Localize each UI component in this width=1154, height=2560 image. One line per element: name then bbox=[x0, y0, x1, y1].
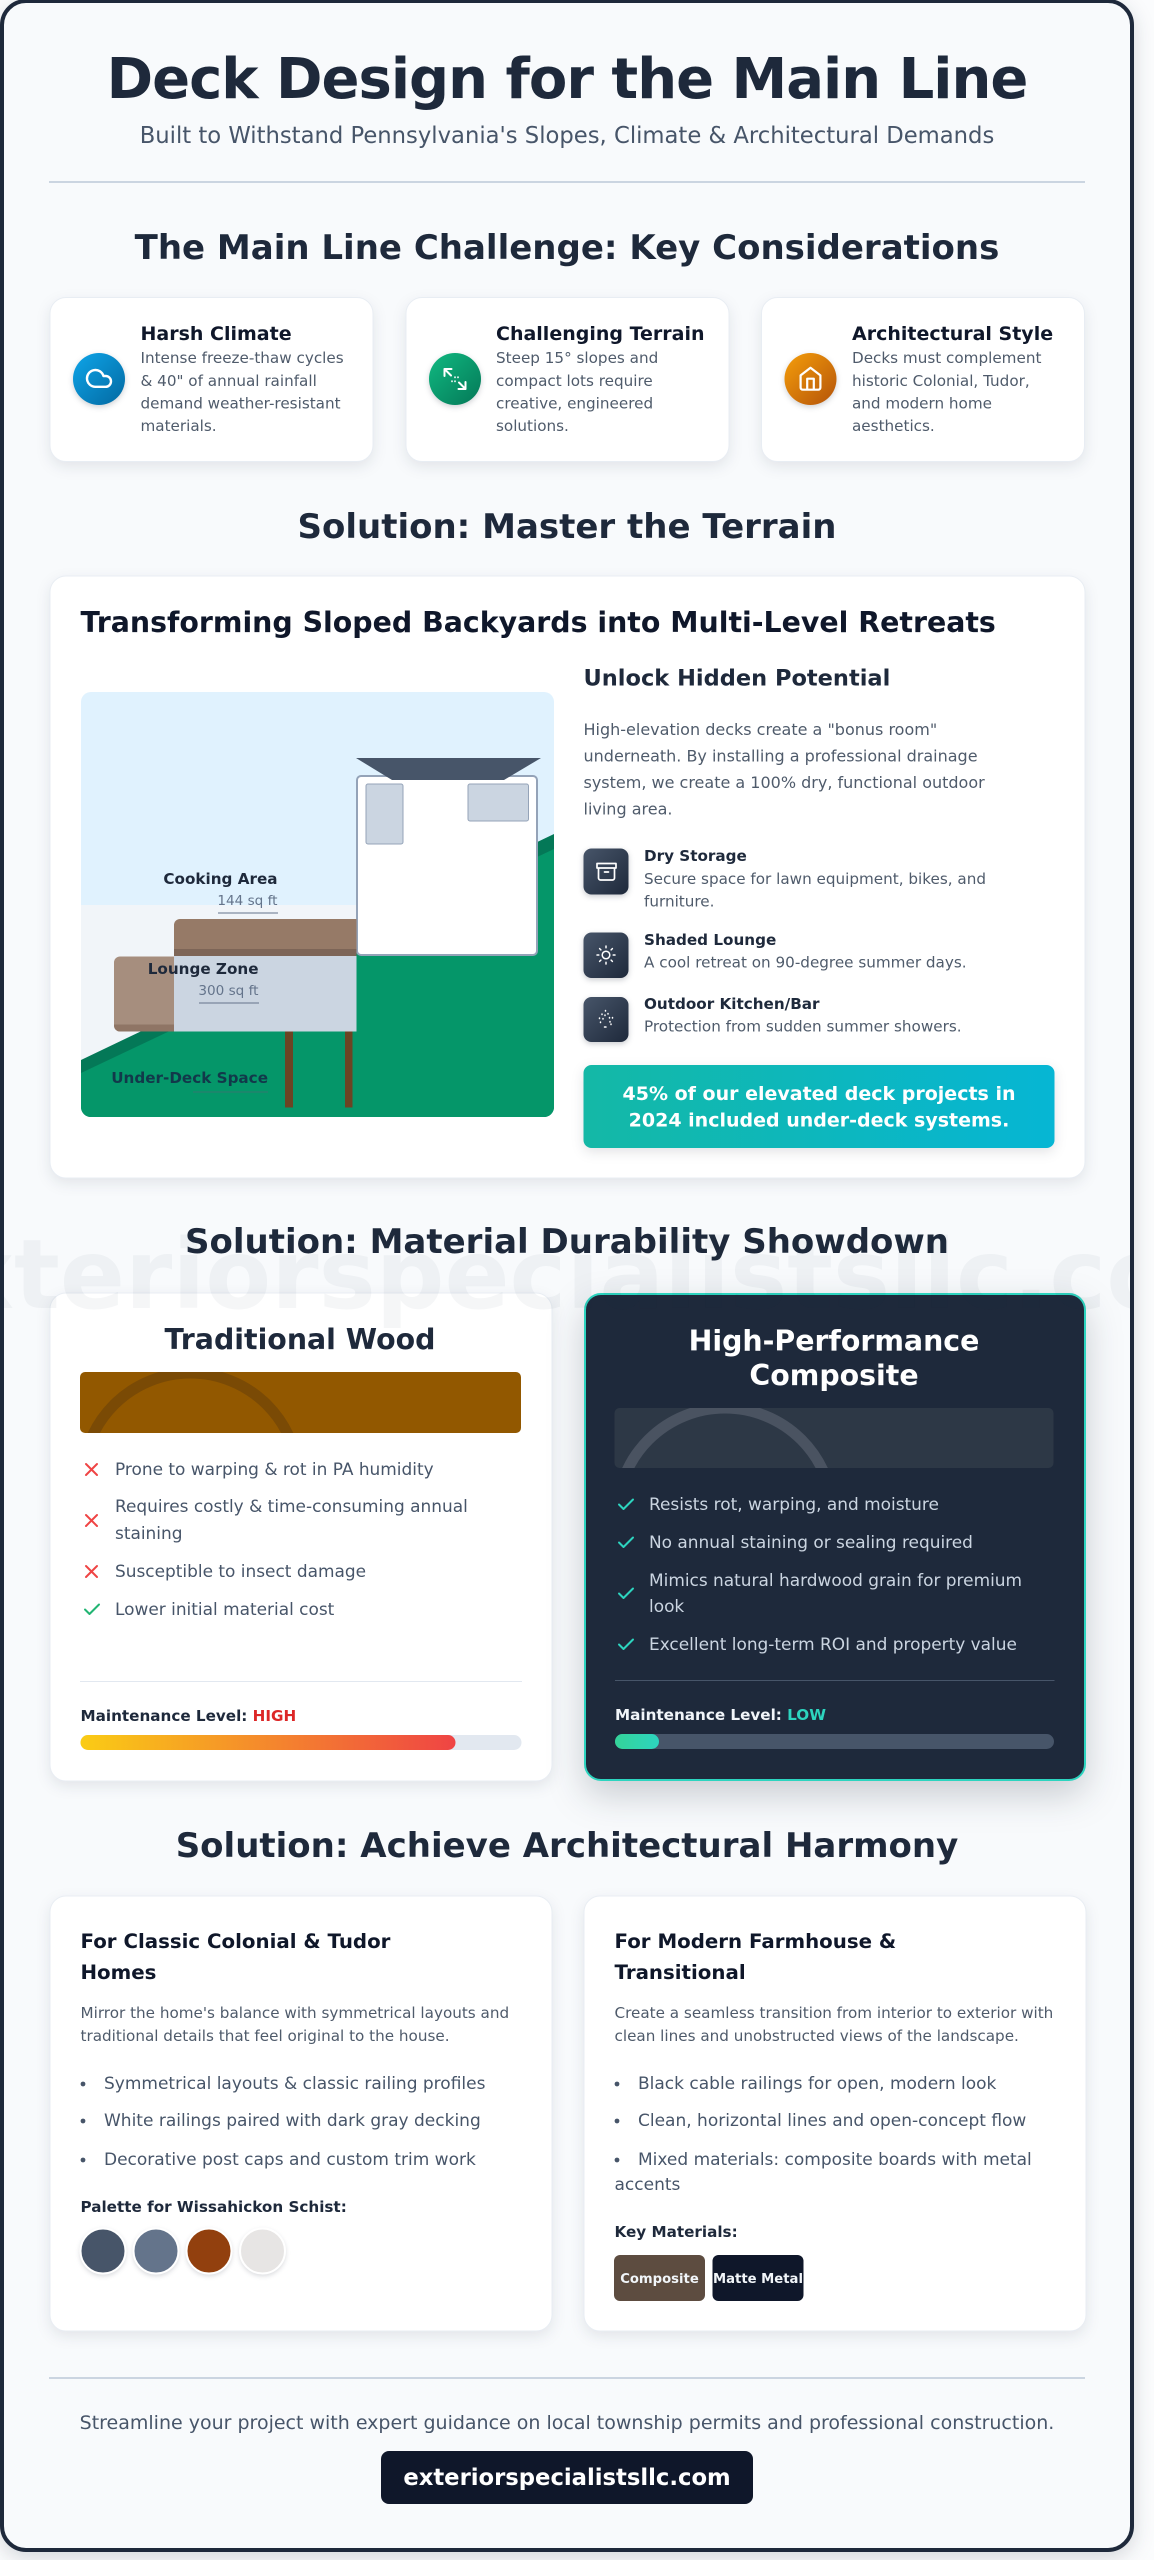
callout: 45 percent: 45% of our elevated deck projects in bbox=[622, 1083, 1016, 1105]
feature: dry storage: Dry Storage bbox=[644, 847, 747, 865]
footer button bbox=[381, 2451, 753, 2504]
icon: cloud bbox=[73, 353, 125, 405]
footer text: Streamline your project with expert guidance on local township permits and professional construction. bbox=[80, 2412, 1054, 2434]
card text: and modern home bbox=[852, 394, 992, 412]
footer button: exteriorspecialistsllc.com bbox=[403, 2465, 731, 2491]
label: cooking area bbox=[163, 870, 278, 914]
icon: dots bbox=[600, 1010, 612, 1027]
card heading bbox=[80, 1930, 391, 1984]
feature: shaded lounge: A cool retreat on 90-degree summer days. bbox=[644, 954, 967, 972]
list: composite benefits: No annual staining or sealing required bbox=[649, 1532, 973, 1552]
maintenance meter: high: Maintenance Level: HIGH bbox=[80, 1707, 296, 1725]
panel: classic homes bbox=[50, 1896, 552, 2331]
panel: high-performance composite bbox=[585, 1294, 1085, 1780]
card heading: Homes bbox=[80, 1961, 156, 1984]
palette: Palette for Wissahickon Schist: bbox=[80, 2198, 347, 2216]
card description bbox=[80, 2004, 509, 2045]
heading: architectural harmony: Solution: Achieve Architectural Harmony bbox=[176, 1826, 958, 1866]
card text: historic Colonial, Tudor, bbox=[852, 372, 1030, 390]
card description: traditional details that feel original to the house. bbox=[80, 2027, 450, 2045]
text: unlock hidden potential: underneath. By installing a professional drainage bbox=[584, 746, 978, 766]
card heading bbox=[689, 1324, 979, 1392]
list: classic features: White railings paired with dark gray decking bbox=[104, 2111, 481, 2131]
feature: outdoor kitchen: Outdoor Kitchen/Bar bbox=[644, 995, 820, 1013]
feature: outdoor kitchen bbox=[584, 995, 962, 1042]
list: composite benefits: Mimics natural hardwood grain for premium bbox=[649, 1570, 1022, 1590]
feature: dry storage: Secure space for lawn equipment, bikes, and bbox=[644, 870, 986, 888]
feature: dry storage bbox=[584, 847, 986, 910]
card text: Harsh Climate bbox=[140, 323, 292, 345]
card text: compact lots require bbox=[496, 372, 653, 390]
text: unlock hidden potential: High-elevation decks create a "bonus room" bbox=[584, 720, 937, 739]
text: unlock hidden potential: living area. bbox=[584, 800, 672, 818]
card text: materials. bbox=[140, 417, 217, 435]
feature: shaded lounge: Shaded Lounge bbox=[644, 931, 776, 949]
list: composite benefits: Excellent long-term ROI and property value bbox=[649, 1634, 1017, 1654]
feature: outdoor kitchen: Protection from sudden summer showers. bbox=[644, 1018, 962, 1036]
list: composite benefits: Resists rot, warping, and moisture bbox=[649, 1494, 939, 1514]
card text: Decks must complement bbox=[852, 349, 1041, 367]
list: wood drawbacks: Requires costly & time-consuming annual bbox=[115, 1496, 468, 1516]
card text bbox=[140, 323, 344, 435]
composite swatch bbox=[614, 1408, 1054, 1468]
feature: dry storage: furniture. bbox=[644, 892, 714, 910]
panel: architectural style bbox=[762, 298, 1084, 462]
card text: & 40" of annual rainfall bbox=[140, 372, 317, 390]
title: Deck Design for the Main Line bbox=[107, 47, 1027, 112]
icon: terrain arrows bbox=[429, 353, 481, 405]
list: classic features bbox=[81, 2074, 486, 2170]
palette bbox=[80, 2198, 347, 2274]
card heading: High-Performance bbox=[689, 1324, 979, 1358]
panel: traditional wood bbox=[50, 1293, 552, 1781]
card text: demand weather-resistant bbox=[140, 394, 341, 412]
key materials: Matte Metal bbox=[713, 2272, 803, 2287]
key materials: Composite bbox=[620, 2272, 699, 2287]
card heading: For Modern Farmhouse & bbox=[614, 1930, 896, 1953]
list: wood drawbacks: Lower initial material cost bbox=[115, 1599, 335, 1619]
list: wood drawbacks: Prone to warping & rot in PA humidity bbox=[115, 1459, 434, 1479]
maintenance meter: high bbox=[80, 1707, 522, 1750]
label: lounge zone: 300 sq ft bbox=[198, 983, 258, 999]
card heading: Composite bbox=[749, 1359, 919, 1392]
maintenance meter: low bbox=[615, 1706, 1054, 1749]
panel: challenging terrain bbox=[406, 298, 729, 462]
card text bbox=[496, 323, 705, 435]
list: wood drawbacks: staining bbox=[115, 1523, 182, 1543]
card heading bbox=[614, 1930, 896, 1984]
list: classic features: Symmetrical layouts & classic railing profiles bbox=[104, 2074, 486, 2094]
card text: Challenging Terrain bbox=[496, 323, 705, 345]
icon: house bbox=[784, 353, 836, 405]
list: composite benefits bbox=[619, 1494, 1022, 1654]
callout: 45 percent: 2024 included under-deck systems. bbox=[629, 1110, 1009, 1132]
text: unlock hidden potential bbox=[584, 666, 985, 818]
card description: Mirror the home's balance with symmetrical layouts and bbox=[80, 2004, 509, 2022]
card heading: Transitional bbox=[614, 1961, 746, 1984]
card text bbox=[852, 323, 1053, 435]
card text: aesthetics. bbox=[852, 417, 935, 435]
house bbox=[356, 758, 541, 955]
support posts bbox=[285, 1032, 352, 1108]
label: lounge zone: Lounge Zone bbox=[148, 960, 258, 978]
list: wood drawbacks bbox=[85, 1459, 468, 1619]
subtitle: Built to Withstand Pennsylvania's Slopes, Climate & Architectural Demands bbox=[140, 123, 994, 149]
label: cooking area: Cooking Area bbox=[163, 870, 278, 888]
card description bbox=[614, 2004, 1053, 2045]
lower deck bbox=[114, 956, 174, 1032]
upper deck bbox=[174, 919, 356, 956]
key materials: Key Materials: bbox=[614, 2223, 738, 2241]
card text: solutions. bbox=[496, 417, 569, 435]
label: under-deck space: Under-Deck Space bbox=[111, 1069, 268, 1087]
text: unlock hidden potential: system, we create a 100% dry, functional outdoor bbox=[584, 773, 985, 792]
heading: material durability: Solution: Material Durability Showdown bbox=[185, 1222, 949, 1262]
key materials bbox=[614, 2223, 804, 2301]
list: modern features bbox=[614, 2074, 1032, 2195]
list: modern features: accents bbox=[614, 2175, 681, 2195]
list: wood drawbacks: Susceptible to insect damage bbox=[115, 1561, 366, 1581]
label: lounge zone bbox=[148, 960, 259, 1004]
card description: clean lines and unobstructed views of the landscape. bbox=[614, 2027, 1019, 2045]
text: unlock hidden potential: Unlock Hidden Potential bbox=[584, 666, 890, 692]
list: composite benefits: look bbox=[649, 1596, 684, 1616]
under-deck block bbox=[174, 956, 356, 1032]
card text: Steep 15° slopes and bbox=[496, 349, 658, 367]
icon: archive box bbox=[597, 864, 616, 880]
list: classic features: Decorative post caps and custom trim work bbox=[104, 2150, 476, 2170]
panel heading: Transforming Sloped Backyards into Multi-Level Retreats bbox=[80, 606, 996, 639]
panel: harsh climate bbox=[50, 298, 373, 462]
list: modern features: Mixed materials: composite boards with metal bbox=[638, 2150, 1032, 2170]
heading: master the terrain: Solution: Master the Terrain bbox=[298, 507, 836, 547]
callout: 45 percent bbox=[584, 1065, 1054, 1148]
panel: modern homes bbox=[584, 1896, 1086, 2331]
label: cooking area: 144 sq ft bbox=[217, 893, 278, 909]
card text: creative, engineered bbox=[496, 394, 653, 412]
card text: Intense freeze-thaw cycles bbox=[140, 349, 344, 367]
diagram: multi-level deck on slope bbox=[81, 692, 554, 1117]
feature: shaded lounge bbox=[584, 931, 967, 978]
heading: key considerations: The Main Line Challenge: Key Considerations bbox=[135, 228, 999, 268]
list: modern features: Clean, horizontal lines and open-concept flow bbox=[638, 2111, 1026, 2131]
wood swatch bbox=[80, 1372, 521, 1433]
list: modern features: Black cable railings for open, modern look bbox=[638, 2074, 997, 2094]
card heading: For Classic Colonial & Tudor bbox=[80, 1930, 391, 1953]
card description: Create a seamless transition from interior to exterior with bbox=[614, 2004, 1053, 2022]
card heading: Traditional Wood bbox=[165, 1323, 435, 1356]
icon: sun bbox=[597, 946, 615, 964]
maintenance meter: low: Maintenance Level: LOW bbox=[615, 1706, 826, 1724]
card text: Architectural Style bbox=[852, 323, 1053, 345]
panel: terrain solution bbox=[50, 576, 1085, 1178]
